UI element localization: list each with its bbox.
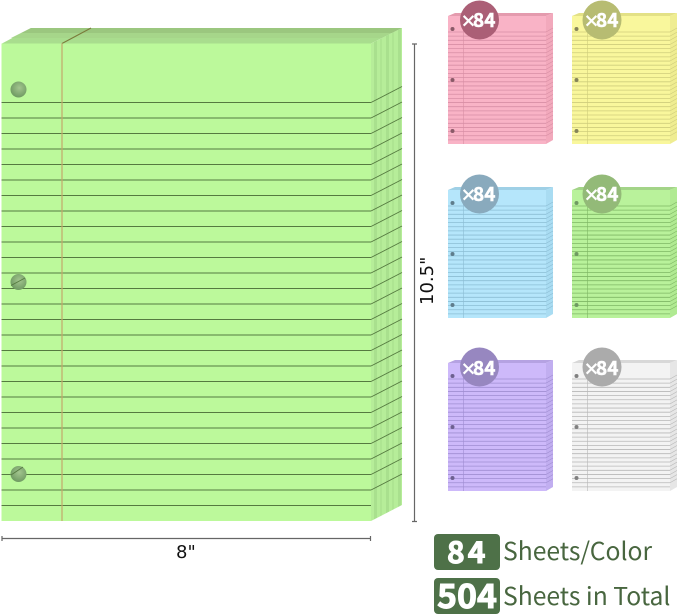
badge: x84 pink — [460, 0, 499, 40]
badge: x84 gray: × — [584, 356, 600, 380]
badge: x84 purple: × — [460, 356, 477, 380]
callout: 84 sheets per color: 84 — [447, 528, 488, 572]
green pad — [572, 174, 677, 318]
badge: x84 blue: × — [460, 182, 477, 206]
badge: x84 pink: × — [460, 8, 477, 32]
blue pad — [448, 174, 553, 318]
badge: x84 gray — [582, 348, 622, 386]
badge: x84 blue — [460, 174, 499, 214]
badge: x84 pink: 84 — [473, 6, 495, 33]
pink pad — [448, 0, 553, 144]
badge: x84 green — [582, 174, 622, 214]
stack side face — [371, 28, 402, 521]
stack top face — [2, 28, 402, 44]
white pad — [572, 348, 677, 491]
badge: x84 green: × — [584, 182, 600, 206]
punch holes — [10, 82, 26, 482]
badge: x84 purple: 84 — [473, 354, 495, 381]
height dimension: 10.5 inches: 10.5" — [417, 257, 438, 305]
badge: x84 yellow — [582, 0, 622, 40]
side edges of ruled lines — [371, 86, 402, 490]
badge: x84 yellow: 84 — [596, 6, 618, 33]
red margin line — [61, 44, 63, 521]
height dimension: 10.5 inches — [412, 44, 438, 522]
badge: x84 yellow: × — [584, 8, 600, 32]
large green notebook paper stack — [2, 28, 402, 521]
callout: 504 sheets in total: Sheets in Total — [503, 577, 670, 613]
front sheet — [2, 44, 371, 521]
ruled lines — [2, 102, 371, 506]
callout: 504 sheets in total — [434, 570, 670, 616]
width dimension: 8 inches — [2, 536, 370, 563]
badge: x84 gray: 84 — [596, 354, 618, 381]
badge: x84 purple — [460, 348, 499, 386]
badge: x84 green: 84 — [596, 180, 618, 207]
purple pad — [448, 348, 553, 491]
badge: x84 blue: 84 — [473, 180, 495, 207]
callout: 84 sheets per color: Sheets/Color — [503, 532, 652, 568]
yellow pad — [572, 0, 677, 144]
width dimension: 8 inches: 8" — [176, 542, 196, 563]
callout: 84 sheets per color — [434, 528, 652, 572]
